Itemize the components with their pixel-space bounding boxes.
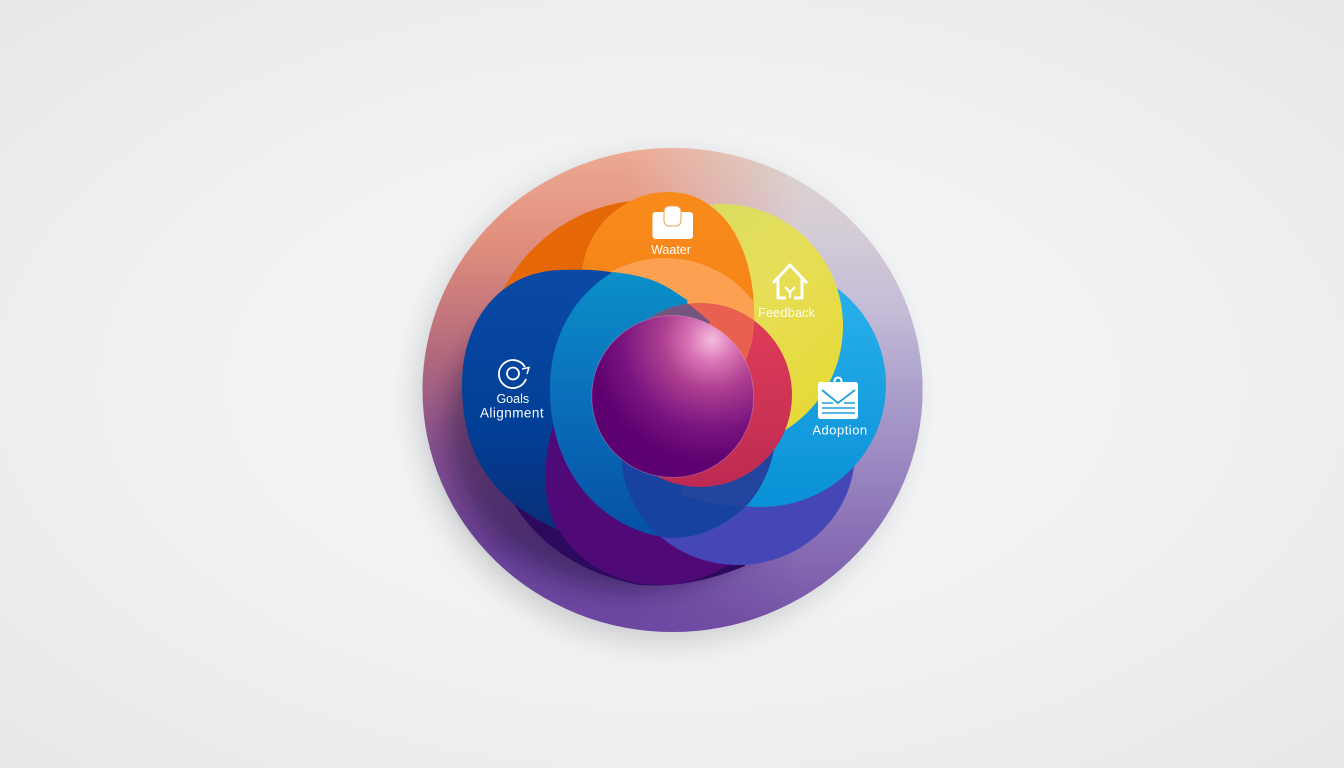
segment: adoption icon and label [812,378,868,438]
disc shadow [416,157,912,643]
red overlap tints [648,303,754,361]
label: adoption: Adoption [812,422,868,438]
circle: purple [545,375,775,585]
circle: orange, water [582,192,754,400]
icon: target [499,360,529,388]
label: goals alignment: Goals [496,392,529,406]
icon: house [773,265,807,298]
light orange overlap [610,258,754,320]
label: goals alignment: Alignment [480,406,544,420]
circle: red [608,303,792,487]
label: water: Waater [651,243,691,257]
label: feedback: Feedback [758,305,816,320]
segment: water icon and label [651,206,693,257]
circle: royal blue, goals alignment [462,270,690,530]
venn infographic canvas [412,148,922,649]
circle: purple overlap front [545,420,640,540]
icon: briefcase [652,206,693,239]
outer disc [422,148,922,632]
segment: goals alignment icon and label [480,360,544,420]
segment: feedback icon and label [758,265,816,320]
central sphere [592,316,754,478]
circle: dark orange back [485,200,815,530]
shape: dark purple back [490,440,745,586]
circle: medium blue ring [550,272,774,538]
inner shadow of stacked circles [448,270,812,590]
indigo overlap on medium blue [621,450,774,538]
circle: yellow, feedback [601,204,843,448]
circle: indigo [621,339,855,565]
icon: envelope clipboard [818,378,858,419]
royal blue cover over orange [570,270,690,420]
circle: light blue, adoption [636,263,886,507]
